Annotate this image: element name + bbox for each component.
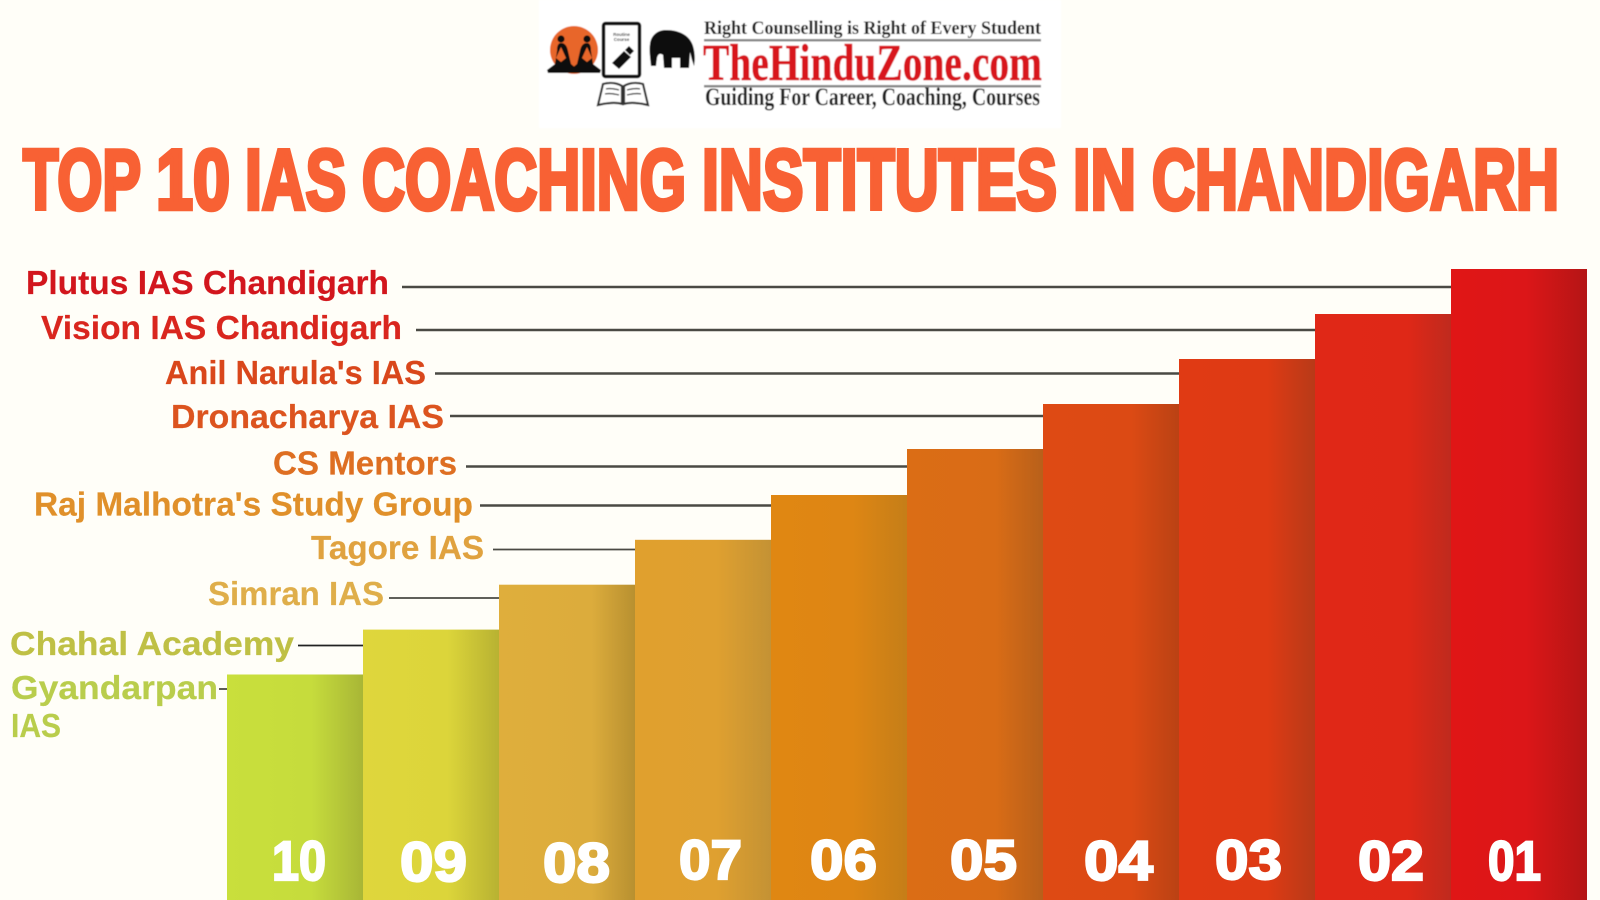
rank 04: 04 xyxy=(1084,829,1153,892)
label: Plutus IAS Chandigarh: Plutus IAS Chandigarh xyxy=(26,264,389,301)
label: Simran IAS: Simran IAS xyxy=(208,575,384,612)
icon: yoga figures on orange sun xyxy=(547,26,601,74)
bar 05 xyxy=(907,449,1043,900)
icon: tablet with USB drive xyxy=(604,24,640,76)
label: Chahal Academy: Chahal Academy xyxy=(10,625,295,662)
rank 03: 03 xyxy=(1215,828,1282,891)
title: COACHING xyxy=(362,133,686,228)
title xyxy=(23,133,1559,228)
rank numbers xyxy=(272,828,1541,894)
label: CS Mentors: CS Mentors xyxy=(273,444,457,482)
bar 04 xyxy=(1043,404,1179,900)
rank 06: 06 xyxy=(810,828,877,891)
staircase bar chart xyxy=(227,269,1587,900)
bar 08 xyxy=(499,585,635,900)
rank 09: 09 xyxy=(400,830,467,893)
label: Gyandarpan IAS: Gyandarpan xyxy=(11,669,218,706)
label: Dronacharya IAS: Dronacharya IAS xyxy=(171,398,444,435)
title: INSTITUTES xyxy=(702,133,1057,228)
rank 01: 01 xyxy=(1488,829,1541,892)
bar 03 xyxy=(1179,359,1315,900)
label: Raj Malhotra's Study Group: Raj Malhotra's Study Group xyxy=(34,486,473,522)
title: 10 xyxy=(156,133,230,228)
label: Vision IAS Chandigarh: Vision IAS Chandigarh xyxy=(41,309,402,346)
icon: open book xyxy=(598,83,648,105)
bar 09 xyxy=(363,630,499,900)
logo subtitle: Guiding For Career, Coaching, Courses xyxy=(705,84,1040,111)
icon: tablet with USB drive: Routine xyxy=(613,32,630,37)
logo tagline: Right Counselling is Right of Every Student xyxy=(704,18,1042,39)
icon: tablet with USB drive: Course xyxy=(614,37,630,42)
label: Tagore IAS: Tagore IAS xyxy=(311,529,484,566)
bar 10 xyxy=(227,674,363,900)
bar 06 xyxy=(771,495,907,900)
logo: TheHinduZone.com xyxy=(539,0,1061,128)
rank 05: 05 xyxy=(950,828,1017,891)
title: IN xyxy=(1073,133,1136,228)
label: Anil Narula's IAS: Anil Narula's IAS xyxy=(165,354,426,391)
bar 01 xyxy=(1451,269,1587,900)
rank 08: 08 xyxy=(543,831,610,894)
leader lines xyxy=(219,287,1451,689)
label: Gyandarpan IAS: IAS xyxy=(11,707,61,744)
rank 02: 02 xyxy=(1358,829,1424,892)
title: TOP xyxy=(23,133,141,228)
rank 10: 10 xyxy=(272,829,326,892)
bar 07 xyxy=(635,540,771,900)
institute labels xyxy=(10,264,484,744)
icon: elephant xyxy=(650,30,695,68)
bar 02 xyxy=(1315,314,1451,900)
rank 07: 07 xyxy=(679,828,742,891)
logo wordmark: TheHinduZone.com xyxy=(703,35,1042,92)
title: IAS xyxy=(245,133,346,228)
